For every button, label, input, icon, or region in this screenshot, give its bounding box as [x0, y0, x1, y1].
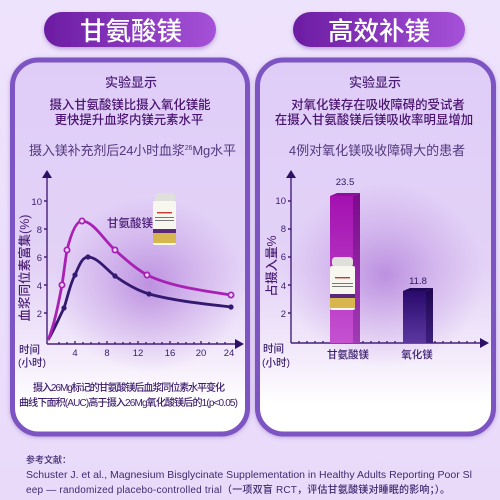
title pill: 甘氨酸镁: [44, 12, 216, 47]
y tick labels: 2: [37, 309, 42, 320]
y tick labels: 4: [37, 281, 42, 292]
y tick labels: 2: [281, 309, 286, 320]
y tick labels: 10: [275, 196, 286, 207]
text block: right finding: [275, 97, 473, 127]
chart subtitle: 摄入镁补充剂后24小时血浆: [29, 143, 185, 158]
text block: left finding: 更快提升血浆内镁元素水平: [55, 112, 203, 127]
bar labels: 甘氨酸镁: [327, 348, 369, 361]
chart subtitle: Mg水平: [192, 143, 236, 158]
y tick labels: 4: [281, 281, 286, 292]
line: magnesium oxide: [48, 254, 234, 340]
y tick labels: 10: [31, 197, 42, 208]
y tick labels: [275, 196, 286, 320]
x axis label: 时间: [19, 343, 40, 356]
x tick labels: [72, 348, 234, 359]
x axis label: (小时): [18, 356, 46, 369]
x tick labels: 20: [196, 348, 206, 359]
axes: [288, 175, 486, 343]
text block: right finding: 对氧化镁存在吸收障碍的受试者: [291, 97, 465, 112]
y axis label: 占摄入量%: [264, 235, 279, 297]
text block: left finding: [49, 97, 211, 127]
x tick labels: 8: [104, 348, 110, 359]
y tick labels: 8: [281, 224, 286, 235]
y axis label: 血浆同位素富集(%): [17, 215, 32, 321]
x axis label: (小时): [262, 356, 290, 369]
text block: left footnote: [19, 381, 238, 409]
heading: experiment result: 实验显示: [349, 75, 401, 90]
title pill: 高效补镁: [293, 12, 465, 47]
icon: supplement bottle: [153, 193, 176, 245]
bar: magnesium glycinate 23.5: 23.5: [336, 177, 354, 188]
text block: left finding: 摄入甘氨酸镁比摄入氧化镁能: [49, 97, 211, 112]
line chart: [17, 170, 244, 369]
references heading: 参考文献：: [26, 454, 71, 465]
axes: [44, 175, 240, 344]
bar labels: 氧化镁: [401, 348, 433, 361]
text block: left footnote: 曲线下面积(AUC)高于摄入26Mg氧化酸镁后的1(p<0.05): [19, 396, 238, 409]
title pill: 高效补镁: 高效补镁: [328, 18, 430, 46]
line: magnesium glycinate: [48, 218, 234, 340]
x axis label: [262, 342, 290, 369]
text block: right finding: 在摄入甘氨酸镁后镁吸收率明显增加: [275, 112, 473, 127]
reference line 1: Schuster J. et al., Magnesium Bisglycinate Supplementation in Healthy Adults Reporting Poor Sl: [26, 469, 472, 481]
chart subtitle: 26: [185, 145, 193, 152]
y tick labels: 6: [281, 252, 286, 263]
bar labels: [327, 348, 433, 361]
x axis label: 时间: [263, 342, 284, 355]
text block: left footnote: 摄入26Mg标记的甘氨酸镁后血浆同位素水平变化: [33, 381, 225, 394]
chart subtitle: 4例对氧化镁吸收障碍大的患者: [289, 143, 465, 158]
x tick labels: 16: [165, 348, 175, 359]
reference line 2: eep — randomized placebo-controlled trial（一项双盲 RCT，评估甘氨酸镁对睡眠的影响；）。: [26, 483, 450, 496]
x tick labels: 24: [224, 348, 234, 359]
y tick labels: 6: [37, 253, 42, 264]
panel: right, absorption bar chart: [258, 60, 494, 434]
y tick labels: 8: [37, 225, 42, 236]
bar: magnesium oxide 11.8: 11.8: [409, 276, 427, 287]
series label: 甘氨酸镁: [107, 216, 153, 230]
panel: left, plasma isotope line chart: [12, 60, 248, 434]
heading: experiment result: 实验显示: [105, 75, 157, 90]
bar: magnesium glycinate 23.5: [330, 177, 360, 343]
x tick labels: 4: [72, 348, 78, 359]
title pill: 甘氨酸镁: 甘氨酸镁: [80, 18, 182, 46]
bar chart: [262, 170, 489, 369]
references: [26, 454, 472, 496]
x tick labels: 12: [133, 348, 143, 359]
bar: magnesium oxide 11.8: [403, 276, 433, 343]
x axis label: [18, 343, 46, 369]
icon: supplement bottle: [330, 257, 355, 310]
y tick labels: [31, 197, 42, 320]
